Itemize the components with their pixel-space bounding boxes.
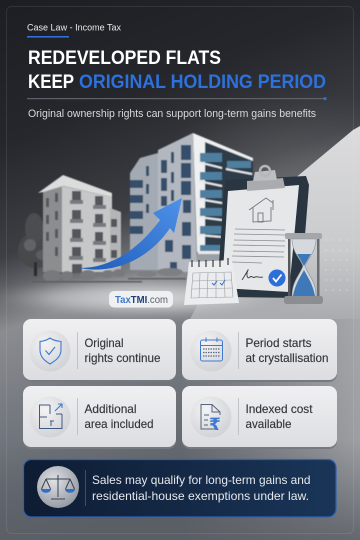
title	[28, 48, 326, 93]
icon: house	[249, 198, 273, 222]
dot texture	[325, 239, 348, 291]
title: REDEVELOPED FLATS	[28, 48, 221, 69]
callout panel: residential-house exemptions under law.	[92, 489, 309, 503]
illustration: growth arrow	[80, 198, 182, 270]
eyebrow label	[27, 22, 121, 38]
illustration: new tower	[128, 133, 253, 280]
shrubs	[43, 269, 125, 282]
icon: rupee document: ₹	[209, 415, 221, 435]
brand badge: TaxTMI.com	[115, 294, 168, 306]
card: original rights	[23, 319, 176, 382]
icon: rupee document	[190, 396, 232, 438]
title: KEEP	[28, 72, 74, 93]
icon: shield	[30, 330, 70, 372]
signature	[242, 270, 263, 280]
callout panel: Sales may qualify for long-term gains and	[92, 473, 310, 487]
tree	[18, 213, 54, 276]
card: original rights: rights continue	[84, 351, 161, 365]
card: additional area	[23, 386, 176, 449]
card: period starts: Period starts	[246, 336, 312, 350]
card: additional area: area included	[84, 417, 154, 431]
eyebrow label: Case Law - Income Tax	[27, 22, 121, 34]
document lines	[232, 229, 285, 263]
icon: scales	[37, 466, 79, 508]
title rule	[27, 97, 327, 100]
icon: check badge	[268, 270, 286, 286]
card: period starts: at crystallisation	[246, 351, 328, 365]
icon: calendar	[190, 330, 232, 372]
card: indexed cost: available	[246, 417, 292, 431]
card: period starts	[182, 319, 337, 382]
clip	[247, 166, 285, 191]
card: additional area: Additional	[84, 402, 136, 416]
card: indexed cost: Indexed cost	[246, 402, 313, 416]
card: indexed cost	[182, 386, 337, 449]
subtitle: Original ownership rights can support long-term gains benefits	[28, 108, 316, 120]
illustration: old building	[18, 175, 142, 282]
card: original rights: Original	[84, 336, 124, 350]
illustration: calendar	[184, 258, 239, 305]
brand badge	[109, 291, 173, 308]
icon: floor plan	[30, 396, 70, 438]
title: ORIGINAL HOLDING PERIOD	[79, 72, 326, 93]
illustration: hourglass	[284, 233, 323, 304]
illustration: clipboard	[219, 166, 309, 298]
callout panel	[24, 460, 336, 517]
